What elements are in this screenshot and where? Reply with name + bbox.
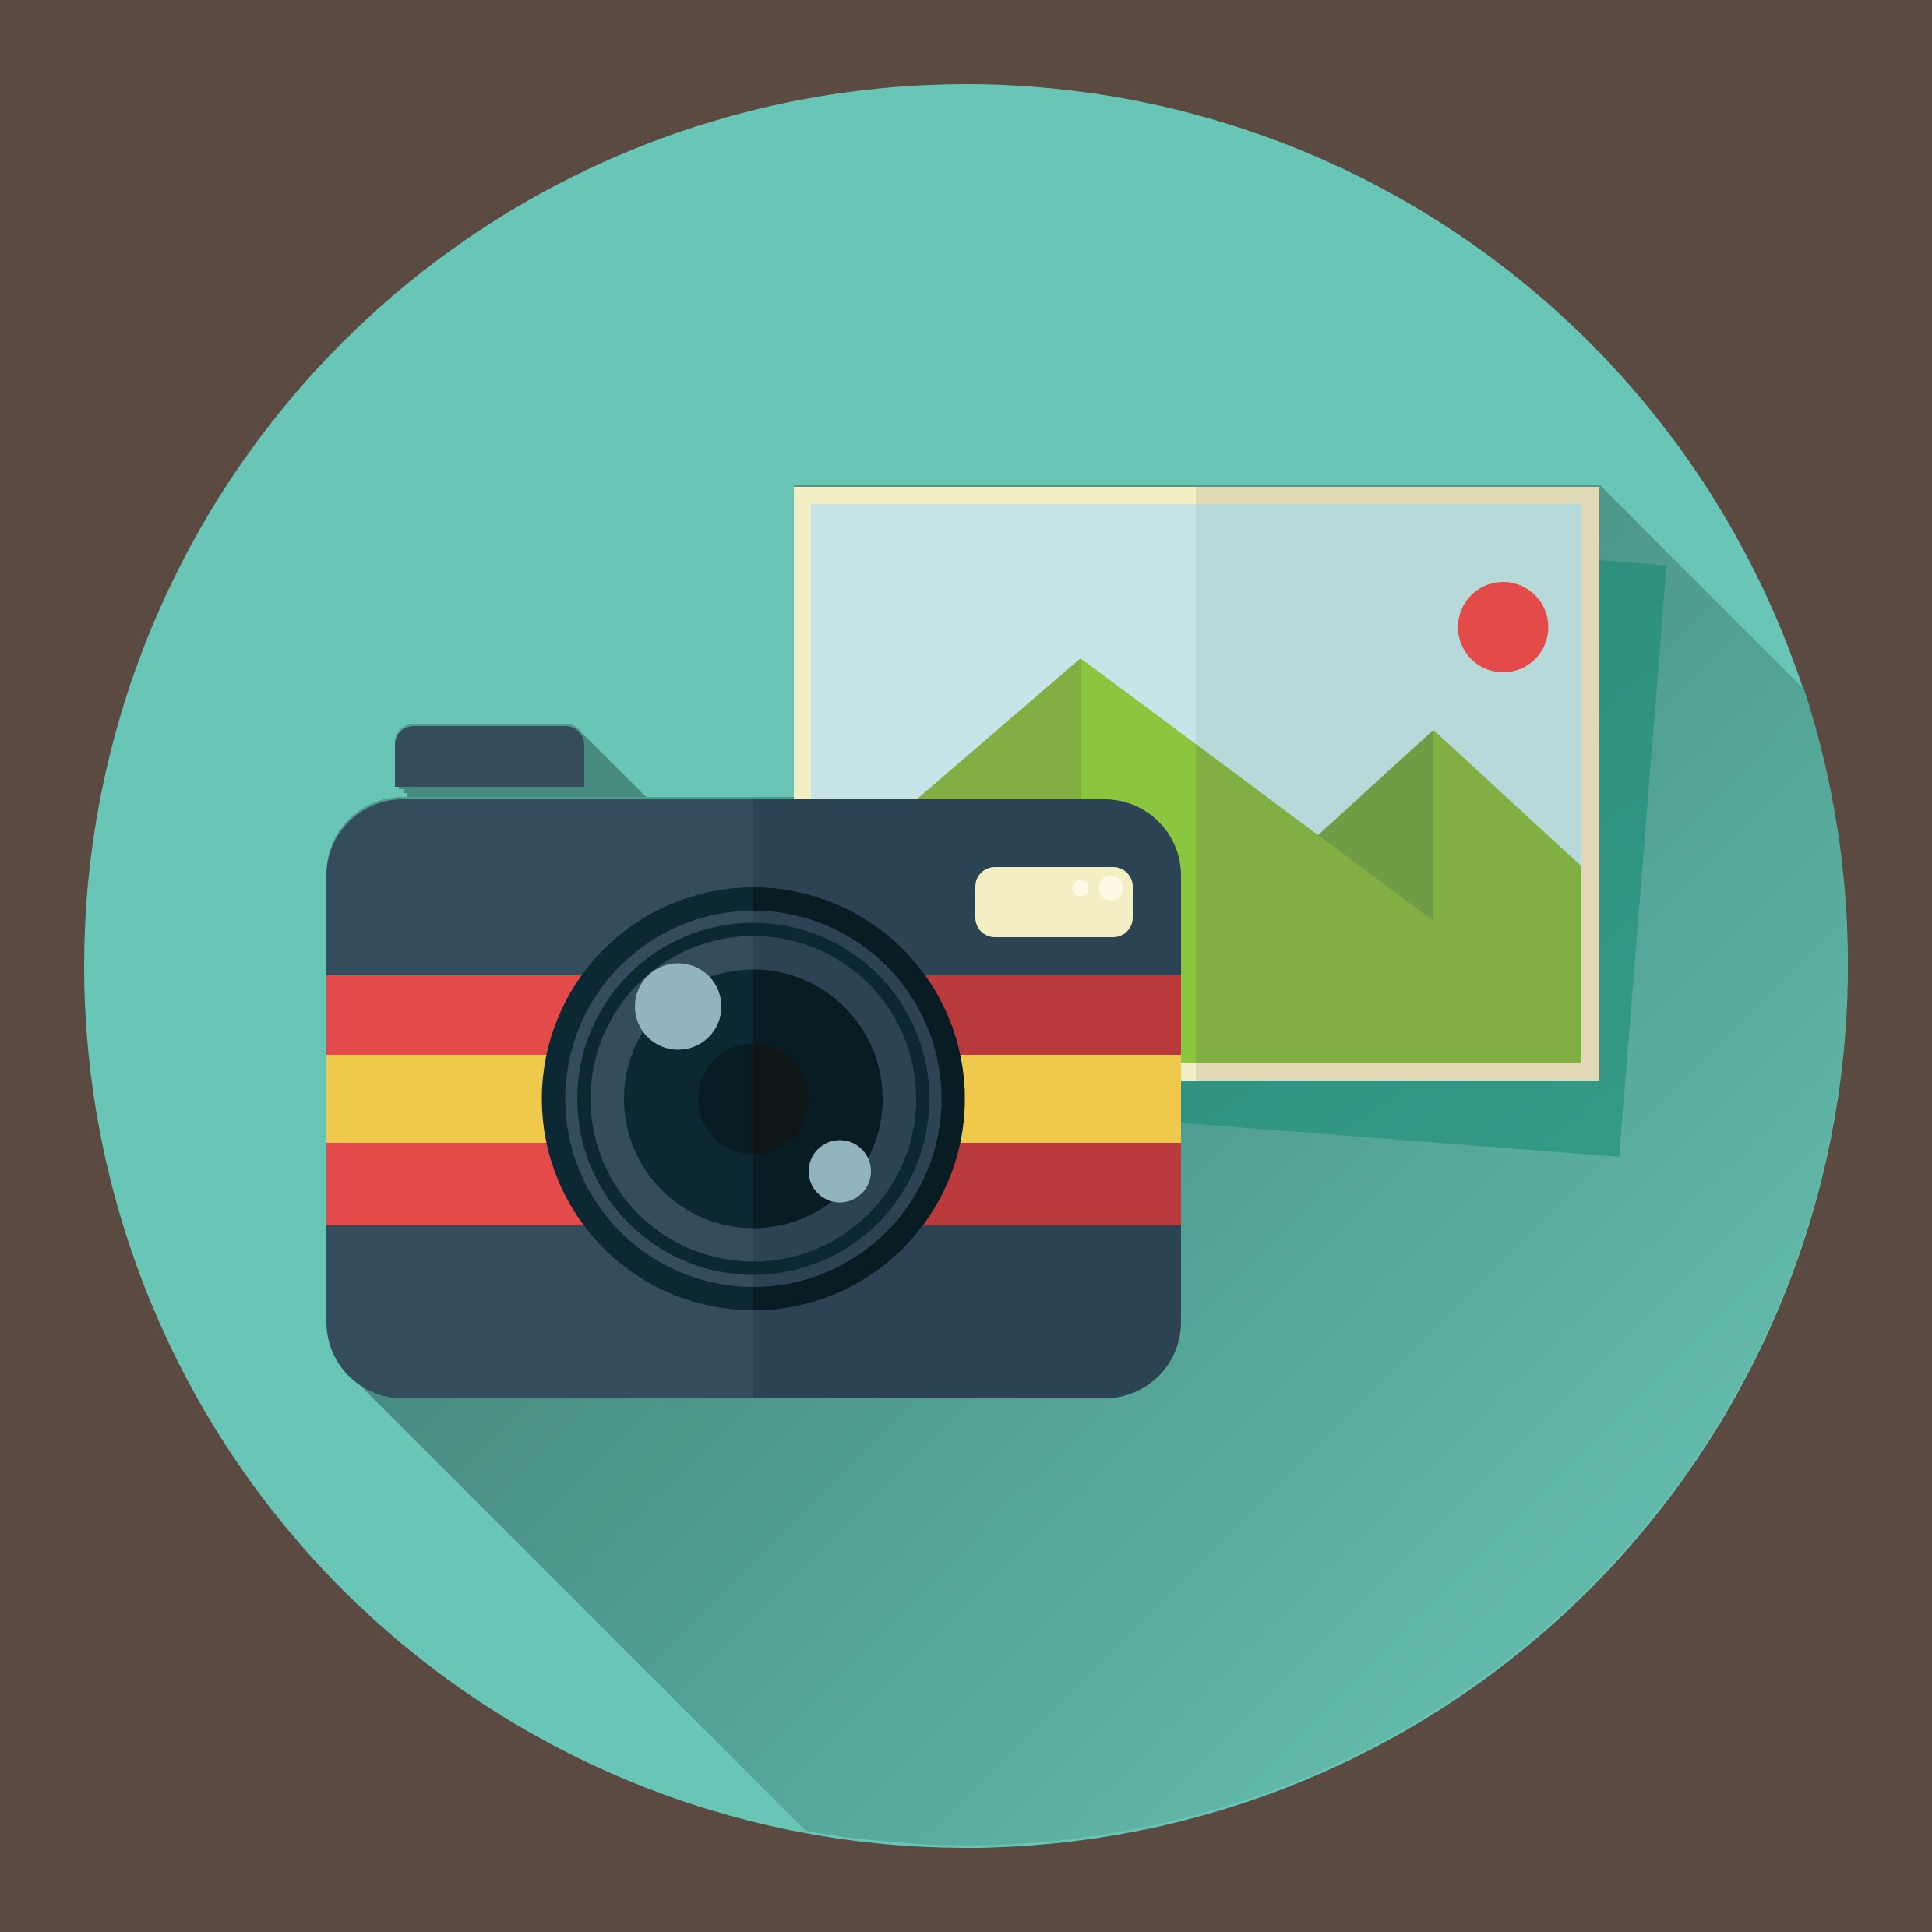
lens inner light ring (591, 936, 916, 1262)
lens pupil (698, 1044, 809, 1155)
sky left (811, 504, 1196, 1063)
mountains (811, 658, 1581, 1063)
long shadow (360, 485, 1848, 1846)
camera (326, 724, 1181, 1398)
flash small glint (1072, 880, 1089, 896)
shutter button shadow (399, 731, 647, 802)
sun (1458, 582, 1549, 672)
tilted back photo (1169, 527, 1666, 1157)
camera top edge shadow (326, 797, 794, 935)
band red lower left (326, 1143, 753, 1225)
lens glass (624, 969, 883, 1228)
flash body (975, 867, 1133, 937)
photo frame right (1196, 487, 1599, 1081)
camera body right (753, 799, 1181, 1398)
photo top edge shadow (794, 485, 1599, 489)
lens large highlight (635, 963, 721, 1050)
flash large glint (1098, 876, 1123, 901)
lens (542, 887, 964, 1310)
band red lower right (753, 1143, 1181, 1225)
photo frame left (794, 487, 1196, 1081)
band red right (753, 975, 1181, 1055)
shutter button (395, 726, 584, 787)
camera body left (326, 799, 753, 1398)
small mountain shaded face (1318, 730, 1433, 921)
big mountain lit face (1081, 658, 1196, 1063)
lens dark ring (577, 922, 929, 1274)
right landscape (1196, 730, 1581, 1063)
sky right (1196, 504, 1581, 1063)
lens light ring (566, 911, 941, 1287)
photo (794, 485, 1599, 1081)
flash (975, 867, 1133, 937)
band yellow (326, 1055, 1181, 1143)
big mountain shaded left (811, 658, 1081, 1063)
lens outer ring (542, 887, 964, 1310)
lens small highlight (809, 1141, 871, 1203)
band red left (326, 975, 753, 1055)
shutter button top edge (395, 724, 584, 787)
